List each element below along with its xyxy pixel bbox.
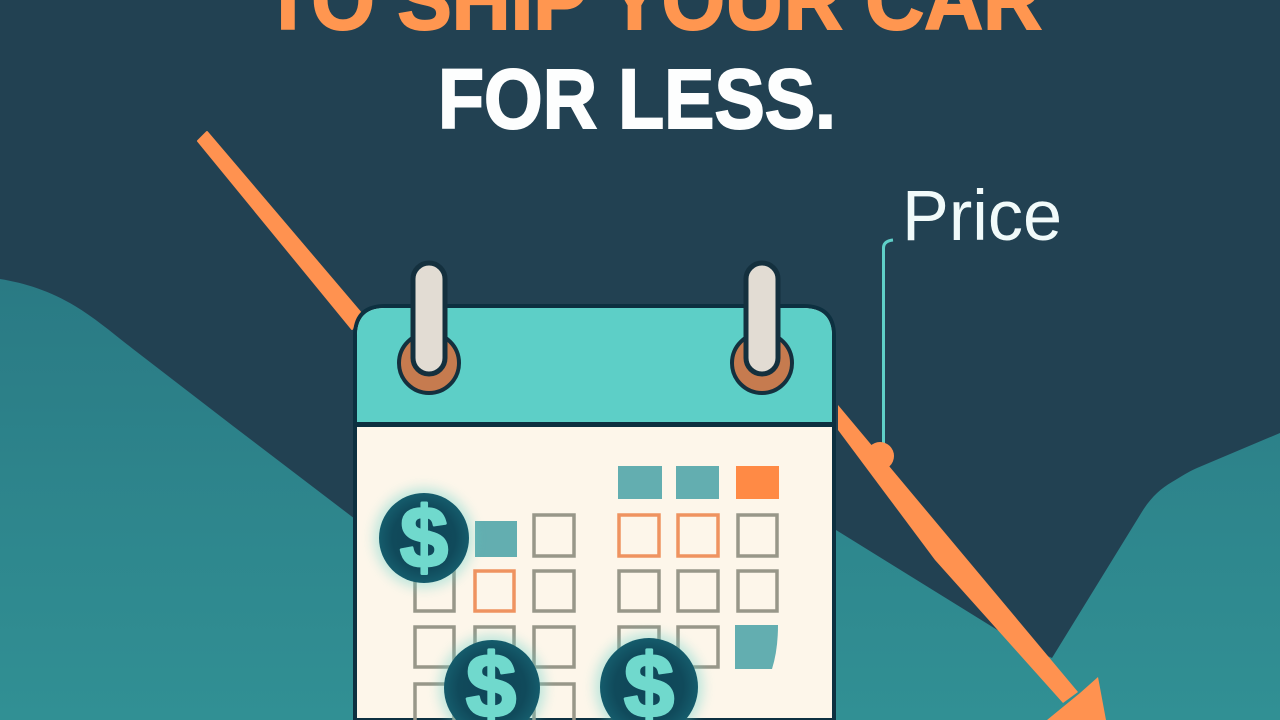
calendar [355,263,834,720]
right teal hill [836,433,1280,720]
outlined orange day cells [475,515,718,611]
header rule [356,422,833,427]
arrowhead [1047,677,1106,720]
calendar header [357,308,832,423]
right binding ring [732,263,792,393]
dollar coin 2 [439,635,545,720]
arrow lower segment [838,405,1078,703]
left binding ring [399,263,459,393]
price callout line [884,240,893,444]
arrow marker dot [866,442,894,470]
title: white line: FOR LESS. [438,52,836,146]
falling price arrow [198,132,1106,720]
outlined grey day cells [415,515,777,720]
arrow upper segment [198,132,360,329]
left teal hill [0,279,355,720]
dollar coin 1: $ [400,490,448,586]
calendar body [355,306,834,720]
dollar coin 1 [374,488,474,588]
highlighted orange day [736,466,779,499]
filled day cells [475,466,778,669]
dollar coin 3 [595,633,703,720]
price label: Price [902,177,1062,256]
